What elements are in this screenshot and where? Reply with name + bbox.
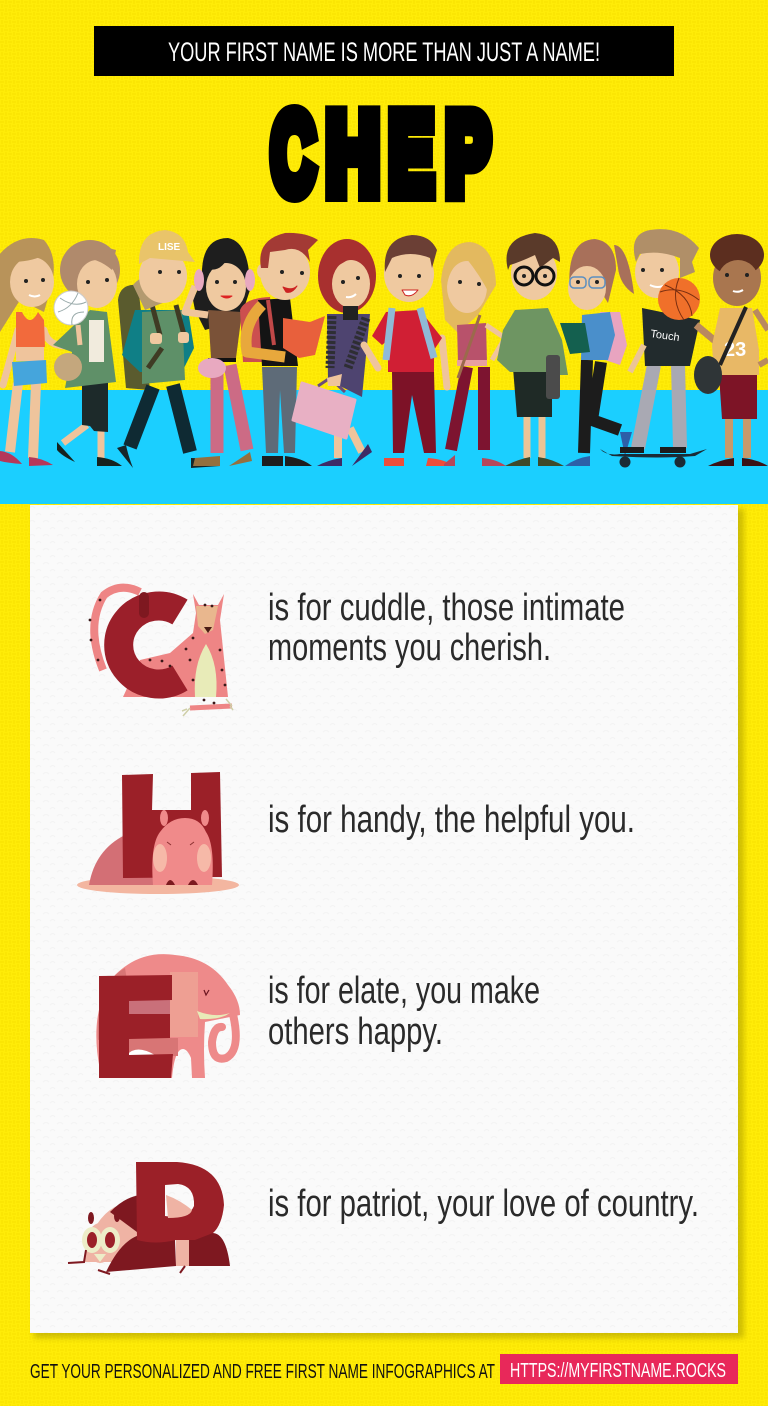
- person 3: hiker with backpack and cap: LISE: [158, 242, 181, 253]
- group of twelve people: [0, 229, 768, 468]
- row C text: [268, 587, 625, 669]
- top banner: [94, 26, 674, 76]
- panel shadow: [34, 509, 744, 1338]
- footer call to action: GET YOUR PERSONALIZED AND FREE FIRST NAME INFOGRAPHICS AT: [30, 1361, 495, 1383]
- person 7: boy in red shirt: [364, 235, 454, 466]
- title: E: [389, 91, 434, 218]
- title: C: [271, 91, 315, 218]
- blue floor band: [0, 390, 768, 504]
- title: [271, 91, 490, 218]
- row C: leopard illustration: [89, 588, 233, 716]
- row E text: [268, 970, 540, 1053]
- footer link badge: [500, 1354, 738, 1384]
- row E text: others happy.: [268, 1011, 443, 1053]
- person 10: girl with tablet and ponytail: [560, 239, 634, 466]
- person 5: boy with book: [240, 233, 325, 466]
- row H: hippo illustration: [77, 772, 239, 894]
- person 2: girl with volleyball: [53, 240, 122, 466]
- person 6: girl with pink bag: [293, 239, 376, 466]
- row C text: is for cuddle, those intimate: [268, 587, 625, 629]
- title: P: [446, 91, 490, 218]
- row P: tarsier illustration: [68, 1162, 230, 1274]
- person 12: boy in yellow tank top with bag: 23: [724, 339, 746, 361]
- person 9: boy with glasses: [497, 233, 568, 466]
- row H text: is for handy, the helpful you.: [268, 799, 635, 841]
- row E: elephant illustration: [96, 954, 240, 1078]
- person 4: girl with headphones: [185, 238, 255, 466]
- row E text: is for elate, you make: [268, 970, 540, 1012]
- person 1: girl in orange top: [0, 238, 78, 466]
- person 8: blonde girl: [441, 242, 506, 466]
- row C text: moments you cherish.: [268, 627, 551, 669]
- person 12: boy in yellow tank top with bag: [694, 234, 768, 466]
- title: H: [326, 91, 380, 218]
- person 3: hiker with backpack and cap: [117, 230, 220, 468]
- person 11: skateboarder with basketball: [600, 229, 735, 468]
- white letters panel: [30, 505, 738, 1333]
- person 11: skateboarder with basketball: Touch: [650, 328, 680, 344]
